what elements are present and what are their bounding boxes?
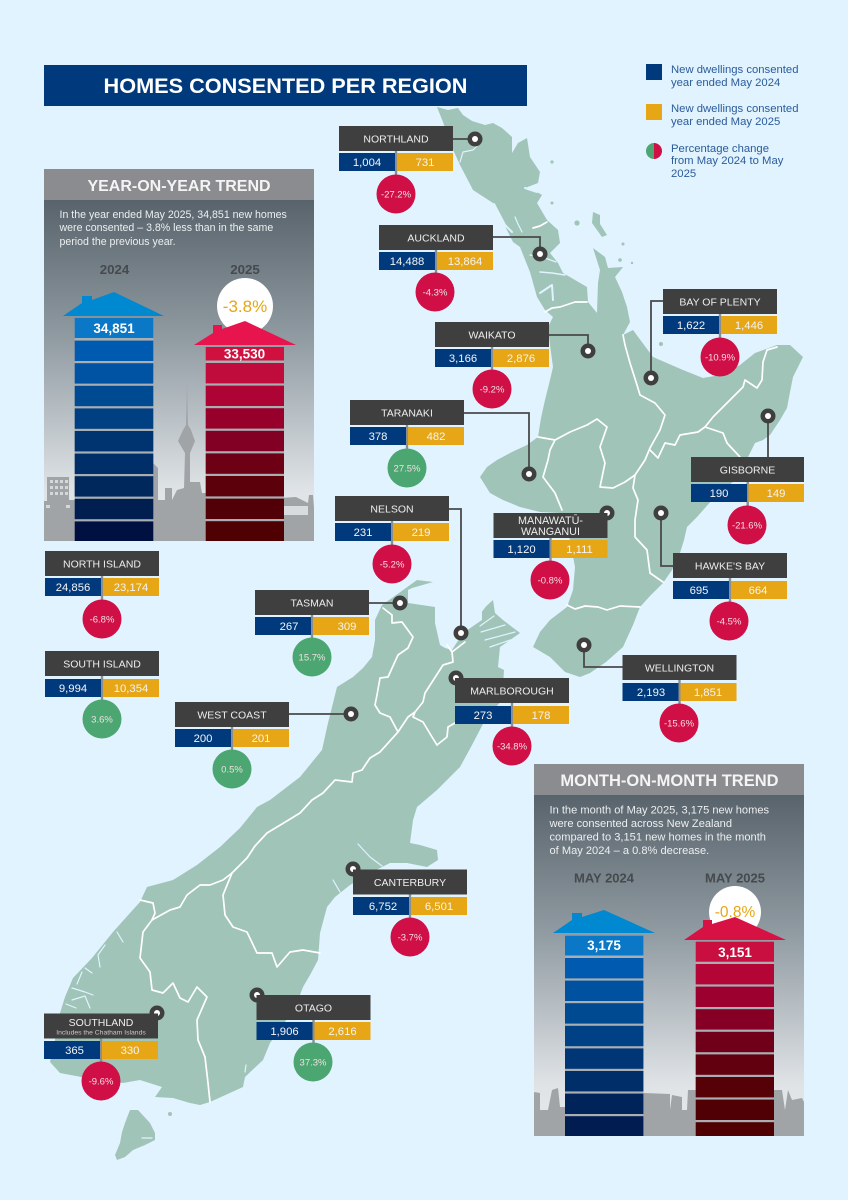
values: 10,354 — [114, 683, 148, 695]
label: TASMAN — [291, 598, 333, 610]
panel: month-on-month trend — [534, 764, 804, 1136]
percent badge — [372, 544, 412, 584]
values: 664 — [749, 585, 767, 597]
panel text — [58, 209, 287, 248]
values: 309 — [338, 621, 356, 633]
leader and pin — [453, 132, 482, 146]
label: WANGANUI — [521, 526, 580, 538]
South Island landmass — [50, 580, 520, 1105]
regional boundaries — [140, 222, 777, 1102]
leader and pin — [449, 509, 468, 640]
values: 190 — [710, 488, 728, 500]
label: MARLBOROUGH — [470, 686, 554, 698]
label — [339, 126, 453, 151]
panel heading: MONTH-ON-MONTH TREND — [560, 772, 779, 790]
region: Northland — [339, 126, 482, 214]
values: 378 — [369, 431, 387, 443]
panel text: In the year ended May 2025, 34,851 new homes — [60, 209, 287, 221]
house roof 2024 — [63, 292, 164, 316]
values: 731 — [416, 157, 434, 169]
column: 2024 — [63, 262, 164, 541]
percent badge — [212, 750, 252, 788]
label May 2024: MAY 2024 — [574, 870, 635, 886]
label — [350, 400, 464, 425]
leader and pin — [289, 706, 358, 722]
percent badge: 37.3% — [300, 1058, 327, 1068]
values: 9,994 — [59, 683, 87, 695]
percent badge: 3.6% — [91, 714, 113, 726]
panel text: compared to 3,151 new homes in the month — [550, 832, 766, 844]
label — [494, 513, 608, 538]
values — [335, 523, 449, 541]
house roof May 2024 — [553, 910, 655, 933]
legend: 2024 dwellings: New dwellings consented — [671, 64, 798, 76]
region: Marlborough — [448, 670, 569, 766]
legend: percentage change: 2025 — [671, 168, 696, 180]
panel text: of May 2024 – a 0.8% decrease. — [550, 845, 709, 857]
value 3,175: 3,175 — [587, 938, 621, 953]
values — [45, 679, 159, 697]
panel background — [534, 795, 804, 1136]
percent badge — [292, 638, 332, 676]
percent badge: 0.5% — [221, 764, 243, 776]
region: North Island total — [45, 551, 159, 638]
percent badge: -34.8% — [497, 742, 528, 752]
building floors May 2024 — [565, 936, 643, 1136]
leader and pin — [654, 506, 673, 566]
percent badge — [472, 370, 512, 408]
values — [455, 706, 569, 724]
values: 200 — [194, 733, 212, 745]
city skyline — [534, 1088, 804, 1136]
values: 178 — [532, 710, 550, 722]
values — [255, 617, 369, 635]
label — [335, 496, 449, 521]
change bubble: -3.8% — [223, 297, 267, 316]
value 3,151: 3,151 — [718, 945, 752, 960]
percent badge: 15.7% — [299, 652, 326, 664]
label — [44, 1014, 158, 1038]
panel text: were consented – 3.8% less than in the same — [58, 222, 273, 234]
percent badge: -21.6% — [732, 520, 763, 532]
percent badge: -4.3% — [423, 288, 448, 298]
label: SOUTH ISLAND — [63, 658, 141, 670]
values — [256, 1022, 370, 1040]
percent badge: -9.6% — [89, 1076, 114, 1088]
percent badge: -5.2% — [380, 560, 405, 570]
values — [350, 427, 464, 445]
values: 219 — [412, 527, 430, 539]
pin — [448, 670, 464, 686]
values — [45, 578, 159, 596]
label: WAIKATO — [468, 330, 516, 342]
values — [339, 153, 453, 171]
values — [175, 729, 289, 747]
legend: 2024 dwellings: year ended May 2024 — [671, 77, 780, 89]
label — [435, 322, 549, 347]
percent badge: -6.8% — [90, 614, 115, 626]
values: 695 — [690, 585, 708, 597]
values — [435, 349, 549, 367]
region: Southland — [44, 1006, 164, 1100]
pin — [250, 988, 264, 1002]
values: 1,851 — [694, 687, 722, 699]
percent badge: -3.7% — [398, 932, 423, 944]
region: Tasman — [255, 590, 408, 676]
panel text: were consented across New Zealand — [548, 818, 732, 830]
region: Wellington — [576, 638, 736, 742]
city skyline — [44, 383, 314, 541]
values: 231 — [354, 527, 372, 539]
house roof May 2025 — [684, 917, 786, 940]
percent badge — [388, 448, 426, 488]
region: West Coast — [175, 702, 358, 788]
panel text: In the month of May 2025, 3,175 new homes — [550, 804, 769, 816]
region: Taranaki — [350, 400, 536, 488]
values: 2,616 — [328, 1026, 357, 1038]
inlets and fiords — [66, 145, 565, 1138]
label: HAWKE'S BAY — [695, 560, 765, 572]
pin — [150, 1006, 164, 1020]
label: CANTERBURY — [374, 877, 446, 889]
percent badge: 27.5% — [394, 464, 421, 474]
Stewart Island — [115, 1110, 155, 1160]
offshore islands — [168, 160, 663, 1116]
values: 23,174 — [114, 582, 148, 594]
percent badge: -0.8% — [538, 576, 563, 586]
region: Nelson — [335, 496, 468, 640]
year label 2024: 2024 — [100, 262, 130, 277]
North Island landmass — [437, 107, 803, 677]
leader and pin — [549, 335, 596, 358]
label: AUCKLAND — [407, 232, 465, 244]
values: 365 — [65, 1045, 84, 1057]
region: Canterbury — [346, 862, 467, 956]
percent badge: -15.6% — [664, 718, 695, 730]
values: 2,876 — [507, 353, 535, 365]
values: 13,864 — [448, 256, 482, 268]
values: 6,752 — [369, 901, 397, 913]
percent badge: -4.5% — [717, 616, 742, 628]
legend: 2025 dwellings — [646, 103, 798, 128]
legend: 2025 dwellings: New dwellings consented — [671, 103, 798, 115]
label: WELLINGTON — [645, 662, 714, 674]
label: OTAGO — [295, 1002, 332, 1014]
label — [255, 590, 369, 615]
values: 1,120 — [507, 544, 536, 556]
values: 3,166 — [449, 353, 477, 365]
region: Gisborne — [691, 408, 804, 544]
legend: percentage change — [646, 143, 784, 180]
panel heading — [534, 764, 804, 795]
values: 330 — [121, 1045, 139, 1057]
percent badge: -10.9% — [705, 352, 736, 364]
label: NORTH ISLAND — [63, 558, 141, 570]
region: South Island total — [45, 651, 159, 738]
house roof 2025 — [194, 321, 296, 345]
title banner: HOMES CONSENTED PER REGION — [104, 73, 467, 98]
region: Bay of Plenty — [644, 289, 777, 386]
label — [622, 655, 736, 680]
values: 273 — [474, 710, 492, 722]
building floors 2025 — [206, 347, 284, 541]
label: WEST COAST — [197, 710, 267, 722]
values: 267 — [280, 621, 298, 633]
percent badge: -9.2% — [480, 384, 505, 396]
legend: percentage change: Percentage change — [671, 143, 769, 155]
values: 24,856 — [56, 582, 90, 594]
change bubble — [709, 886, 761, 938]
values: 482 — [427, 431, 445, 443]
title banner — [44, 65, 527, 106]
percent badge — [660, 704, 698, 742]
pin — [346, 862, 360, 876]
legend: percentage change: from May 2024 to May — [671, 155, 784, 167]
label: Includes the Chatham Islands — [56, 1030, 146, 1036]
leader and pin — [463, 413, 536, 482]
panel heading: YEAR-ON-YEAR TREND — [87, 178, 271, 195]
building floors May 2025 — [696, 942, 774, 1136]
values — [663, 316, 777, 334]
legend — [646, 64, 798, 180]
label: NORTHLAND — [363, 134, 429, 146]
panel text — [548, 804, 769, 857]
values: 1,446 — [735, 320, 763, 332]
values: 201 — [252, 733, 270, 745]
map: New Zealand — [50, 107, 803, 1160]
label — [379, 225, 493, 250]
leader and pin — [576, 638, 623, 667]
values: 2,193 — [637, 687, 665, 699]
values — [44, 1041, 158, 1059]
region: Otago — [250, 988, 370, 1082]
values: 6,501 — [425, 901, 453, 913]
percent badge: -27.2% — [381, 190, 412, 200]
values — [494, 540, 608, 558]
values: 149 — [767, 488, 785, 500]
values — [353, 897, 467, 915]
label: MANAWATŪ- — [518, 515, 583, 527]
label: NELSON — [370, 504, 414, 516]
leader and pin — [493, 237, 548, 262]
values — [379, 252, 493, 270]
pin — [600, 506, 614, 520]
column: 2025 — [194, 262, 296, 541]
year label 2025: 2025 — [230, 262, 260, 277]
values: 1,906 — [270, 1026, 299, 1038]
label May 2025: MAY 2025 — [705, 870, 765, 886]
values: 1,004 — [353, 157, 381, 169]
values: 14,488 — [390, 256, 424, 268]
values — [622, 683, 736, 701]
value 34,851: 34,851 — [93, 321, 135, 336]
building floors 2024 — [75, 318, 153, 541]
values: 1,622 — [677, 320, 705, 332]
label: GISBORNE — [720, 464, 775, 476]
leader and pin — [369, 596, 408, 610]
column: May 2025 — [684, 870, 786, 1136]
value 33,530: 33,530 — [224, 346, 265, 362]
panel: year-on-year trend — [44, 169, 314, 541]
values — [673, 581, 787, 599]
leader and pin — [644, 301, 663, 386]
panel background — [44, 200, 314, 541]
change bubble: -0.8% — [715, 904, 755, 921]
leader and pin — [760, 408, 776, 457]
percent badge — [416, 272, 454, 312]
region: Waikato — [435, 322, 596, 408]
panel text: period the previous year. — [60, 236, 176, 248]
label: TARANAKI — [381, 408, 433, 420]
label: BAY OF PLENTY — [679, 296, 761, 308]
label: SOUTHLAND — [69, 1017, 134, 1029]
region: Hawke's Bay — [654, 506, 787, 640]
legend: 2024 dwellings — [646, 64, 798, 89]
column: May 2024 — [553, 870, 655, 1136]
legend: 2025 dwellings: year ended May 2025 — [671, 116, 780, 128]
label — [175, 702, 289, 727]
region: Auckland — [379, 225, 548, 312]
change bubble — [217, 278, 273, 334]
values — [691, 484, 804, 502]
values: 1,111 — [566, 544, 593, 556]
panel heading — [44, 169, 314, 200]
region: Manawatū-Wanganui — [494, 506, 614, 600]
percent badge — [376, 174, 416, 214]
